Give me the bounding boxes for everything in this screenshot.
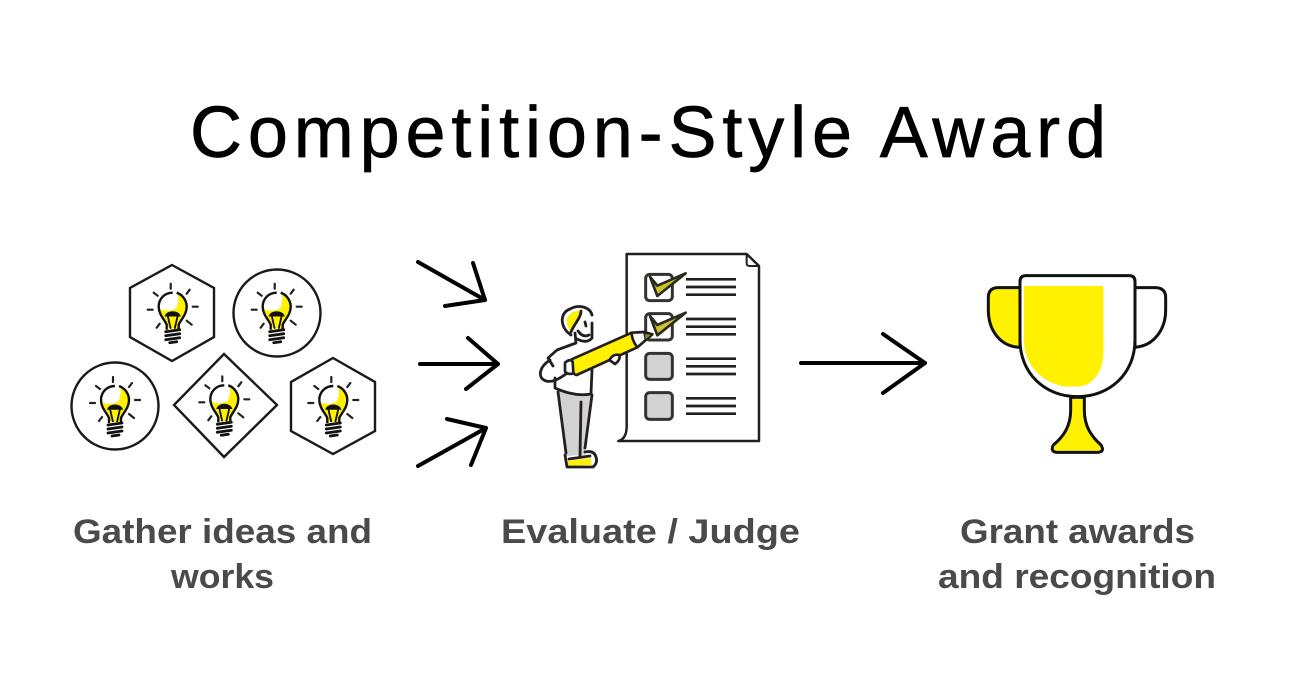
arrow: middle: [420, 338, 498, 389]
illustration: person marking checklist: [540, 254, 759, 467]
label: gather ideas: [73, 513, 372, 596]
label: grant awards: [938, 513, 1216, 596]
arrow: judging to awards: [801, 334, 925, 393]
label: gather ideas: Gather ideas and: [73, 513, 372, 551]
arrow: upper: [418, 262, 485, 306]
label: grant awards: Grant awards: [960, 513, 1195, 551]
giant pencil: [565, 332, 652, 375]
label: evaluate: Evaluate / Judge: [501, 513, 800, 551]
person: [540, 307, 597, 467]
circle badge with bulb, lower left: [72, 362, 158, 450]
icon: trophy: [988, 276, 1166, 452]
label: gather ideas: works: [170, 558, 274, 596]
arrow: lower: [418, 419, 486, 466]
icon group: light bulb ideas: [72, 265, 375, 457]
hexagon badge with bulb: [130, 265, 214, 361]
hexagon badge with bulb, lower right: [291, 358, 375, 454]
arrows converging on judging: [418, 262, 498, 466]
diamond badge with bulb: [174, 354, 277, 457]
title: Competition-Style Award: [190, 93, 1106, 173]
checklist document: [618, 254, 759, 441]
circle badge with bulb: [234, 270, 320, 356]
label: grant awards: and recognition: [938, 558, 1216, 596]
